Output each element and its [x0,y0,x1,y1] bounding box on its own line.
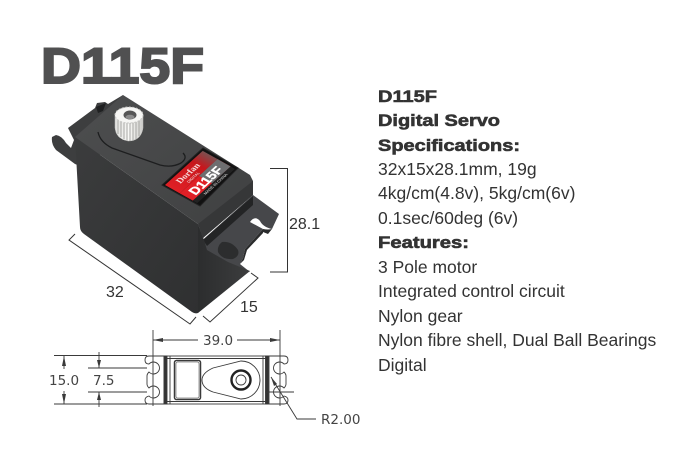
product type: Digital Servo [378,111,500,130]
brand label: Dorfan [173,162,202,185]
specification text: 0.1sec/60deg (6v) [378,208,518,228]
dimension: length 32: 32 [106,284,124,301]
dimension: 7.5: 7.5 [93,373,114,389]
body: front side [75,137,198,313]
dimension: width 15 [203,273,258,322]
body: end side [198,224,250,313]
specifications heading: Specifications: [378,136,520,155]
servo photo [52,95,279,313]
specifications list: 32x15x28.1mm, 19g [378,159,537,179]
output gear [115,107,143,141]
brand label: DIGITAL [185,171,202,184]
specification text: Digital [378,355,427,375]
dimension: height 28.1 [270,168,320,272]
brand label: D115F [185,164,227,197]
dimension: 15.0: 15.0 [49,373,79,389]
mounting tabs [145,356,288,404]
body outline [164,356,269,404]
features list: 3 Pole motor [378,257,477,277]
dimension: width 15: 15 [240,299,258,316]
technical drawing: top view [49,330,360,428]
brand label: MADE IN CHINA [202,172,229,195]
label recess [174,360,200,400]
radius callout R2.00 [265,377,360,428]
output shaft [232,370,250,390]
dimension: 7.5 [88,352,147,407]
title: D115F [41,38,204,94]
specification text [378,87,656,375]
specification text: Nylon fibre shell, Dual Ball Bearings [378,330,656,350]
specification text: 4kg/cm(4.8v), 5kg/cm(6v) [378,183,575,203]
specification text: Integrated control circuit [378,281,565,301]
dimension: 39.0 [153,330,280,406]
features heading: Features: [378,233,469,252]
dimension: height 28.1: 28.1 [289,216,320,233]
flange: rear left tabs [52,95,130,170]
gear cover [202,361,260,399]
dimension: 39.0: 39.0 [203,333,233,349]
flange: right tabs [198,195,279,272]
dimension: length 32 [69,234,196,324]
product name: D115F [378,87,437,106]
raised gear cover edge [98,132,185,166]
body: top face [75,95,253,238]
dimension: 15.0 [49,356,147,404]
radius callout R2.00: R2.00 [321,412,360,428]
specification text: Nylon gear [378,306,463,326]
brand label [162,148,238,206]
